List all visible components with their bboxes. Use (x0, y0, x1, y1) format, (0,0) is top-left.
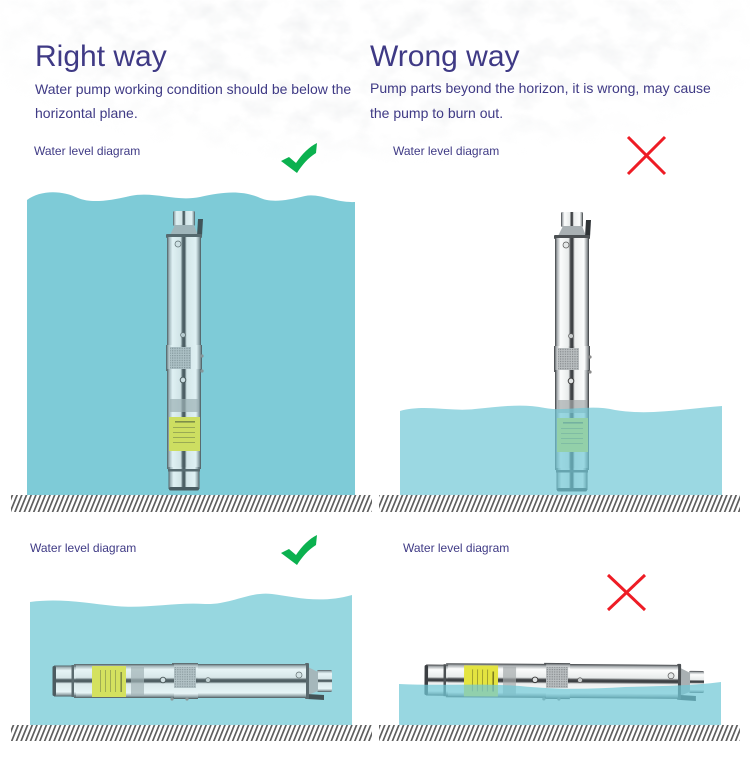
pump: above the water (554, 212, 592, 492)
ground hatch: bottom right (379, 725, 740, 741)
label: top right diagram: Water level diagram (393, 144, 499, 158)
water: full level (27, 192, 355, 495)
text: wrong way description: the pump to burn out. (370, 105, 503, 121)
panel: wrong way, horizontal pump (399, 662, 721, 725)
icon: green check top (281, 143, 317, 173)
panel: wrong way, upright pump (400, 212, 722, 495)
icon: green check bottom (281, 535, 317, 565)
background texture (96, 0, 638, 121)
heading: wrong way: Wrong way (370, 40, 520, 73)
panel: right way, horizontal pump (30, 594, 352, 725)
pump: horizontal submerged (52, 663, 332, 701)
pump: fully submerged (166, 211, 204, 490)
water: low level (400, 406, 722, 495)
label: top left diagram: Water level diagram (34, 144, 140, 158)
heading: right way: Right way (35, 40, 167, 73)
water: full level (30, 594, 352, 725)
icon: red cross top (628, 137, 665, 174)
label: bottom left diagram: Water level diagram (30, 541, 136, 555)
icon: red cross bottom (608, 575, 645, 610)
ground hatch: top right (379, 495, 740, 512)
text: right way description: horizontal plane. (35, 105, 138, 121)
label: bottom right diagram: Water level diagram (403, 541, 509, 555)
text: right way description: Water pump working condition should be below the (35, 81, 351, 97)
ground hatch: top left (11, 495, 372, 512)
ground hatch: bottom left (11, 725, 372, 741)
pump: horizontal half out of water (424, 662, 704, 702)
panel: right way, upright pump (27, 192, 355, 495)
text: wrong way description: Pump parts beyond the horizon, it is wrong, may cause (370, 80, 711, 96)
water: low level (399, 682, 721, 725)
